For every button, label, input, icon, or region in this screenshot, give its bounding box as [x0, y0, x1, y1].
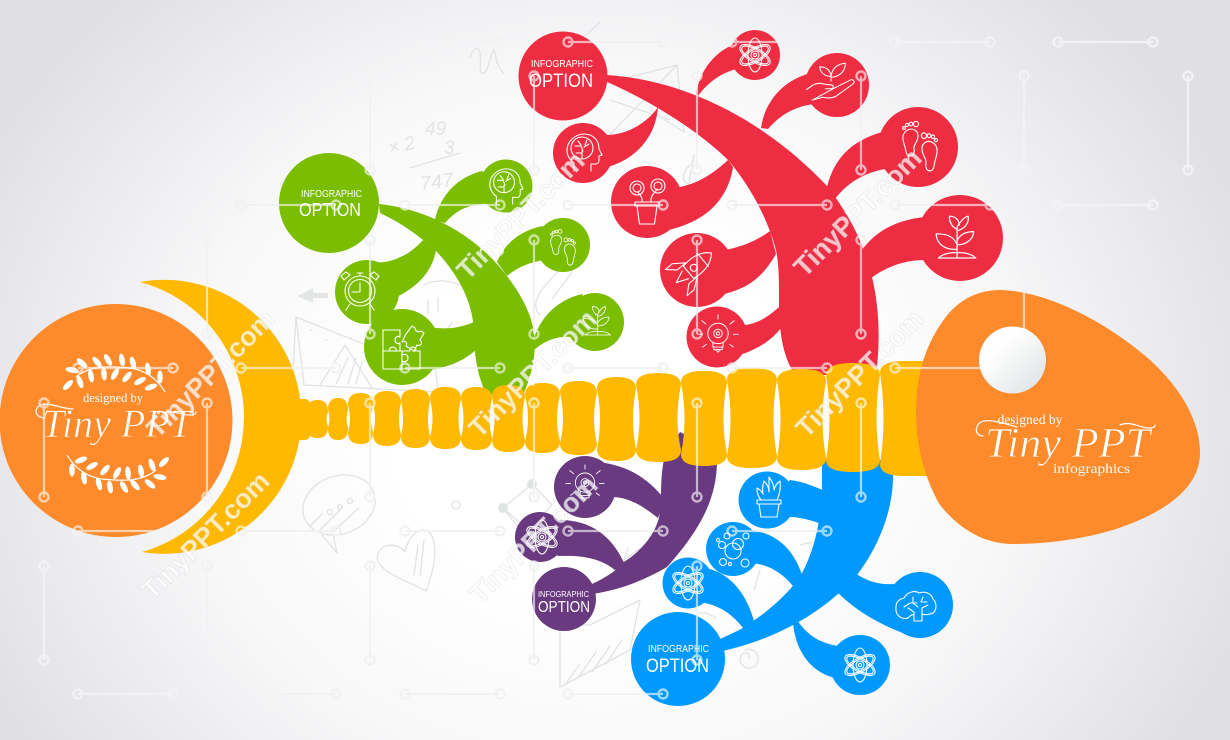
orange head blob — [916, 290, 1200, 544]
icon: light bulb — [554, 456, 616, 518]
icon: puzzle pieces — [364, 309, 440, 385]
icon: head with brain — [553, 123, 613, 183]
green trunk — [379, 204, 535, 395]
fish eye — [979, 326, 1046, 394]
icon: atom — [730, 30, 780, 80]
doodle: smiley face — [424, 281, 486, 333]
purple option circle — [532, 567, 596, 631]
watermark: TinyPPT.com — [788, 143, 927, 282]
green tentacles — [367, 171, 595, 370]
icon: footprints — [878, 107, 958, 187]
icon: head with brain — [480, 160, 532, 212]
green option circle: OPTION — [299, 200, 361, 220]
logo wordmark: Tiny PPT — [42, 401, 195, 446]
purple tentacles — [540, 463, 665, 570]
doodle: pencil sketch — [560, 538, 840, 687]
doodle: left arrow — [297, 288, 328, 303]
fish spine — [296, 361, 935, 476]
watermark: TinyPPT.com — [790, 304, 929, 443]
purple option circle: OPTION — [538, 599, 590, 616]
doodle: molecule — [452, 479, 552, 534]
blue tentacles — [688, 480, 920, 678]
doodle: handwritten sums: 3 — [444, 138, 455, 159]
red option circle — [518, 32, 608, 120]
icon: hand with sprout — [805, 53, 869, 117]
laurel top — [61, 353, 165, 392]
laurel bottom — [67, 455, 171, 494]
doodle: handwritten sums: 747 — [419, 169, 456, 196]
red option circle: INFOGRAPHIC — [531, 58, 593, 70]
icon: alarm clock — [335, 260, 399, 324]
blue option circle: OPTION — [646, 656, 709, 677]
watermark: TinyPPT.com — [463, 304, 602, 443]
icon: plant — [566, 293, 624, 351]
spine neck — [296, 399, 310, 440]
vertebrae — [307, 361, 935, 476]
green option circle: INFOGRAPHIC — [301, 189, 362, 200]
red trunk — [606, 75, 879, 375]
icon: light bulb — [686, 306, 748, 368]
background doodles — [292, 22, 840, 687]
red option circle: OPTION — [529, 71, 593, 92]
infographics text: infographics — [1053, 462, 1130, 477]
icon: succulent — [738, 472, 796, 528]
icon: atom — [830, 635, 890, 695]
doodle: scribble — [470, 49, 504, 73]
panel: fish head — [916, 290, 1200, 544]
icon: rocket — [660, 233, 734, 307]
red tentacles — [583, 42, 960, 354]
panel: tail logo circle — [0, 304, 232, 537]
panel: green branch — [279, 153, 624, 395]
blue option circle — [631, 612, 725, 706]
doodle: open book — [292, 317, 438, 392]
purple trunk — [564, 432, 717, 599]
blue trunk — [678, 460, 893, 659]
panel: purple branch — [515, 432, 717, 631]
logo wordmark: Tiny PPT — [985, 421, 1153, 467]
doodle: handwritten sums: 49 — [425, 119, 447, 140]
green option circle — [279, 153, 379, 253]
icon: brain — [887, 572, 953, 638]
icon: bubbles — [706, 522, 760, 576]
icon: atom — [662, 558, 714, 608]
panel: blue branch — [631, 460, 953, 706]
purple option circle: INFOGRAPHIC — [538, 589, 589, 599]
orange circle — [0, 304, 232, 537]
watermarks — [136, 143, 929, 609]
icon: flower pot — [611, 166, 683, 238]
doodle: paper clip — [536, 264, 572, 315]
designed by text: designed by — [83, 391, 144, 405]
blue option circle: INFOGRAPHIC — [648, 643, 709, 655]
fish tail crescent — [140, 280, 301, 554]
doodle: paper plane — [575, 22, 695, 210]
watermark: TinyPPT.com — [451, 146, 590, 285]
designed by text: designed by — [998, 412, 1063, 427]
doodle: handwritten sums — [386, 119, 460, 196]
watermark: TinyPPT.com — [136, 466, 275, 605]
doodle: handwritten sums: × 2 — [386, 133, 418, 160]
icon: plant — [917, 195, 1003, 281]
doodle: heart — [377, 530, 435, 591]
watermark: TinyPPT.com — [141, 304, 280, 443]
doodle: speech bubble — [294, 465, 384, 553]
logo swashes — [36, 404, 196, 418]
watermark: TinyPPT.com — [464, 470, 603, 609]
icon: atom — [515, 512, 565, 562]
logo swashes — [976, 421, 1155, 436]
panel: red branch — [518, 30, 1003, 375]
icon: footprints — [536, 218, 590, 272]
